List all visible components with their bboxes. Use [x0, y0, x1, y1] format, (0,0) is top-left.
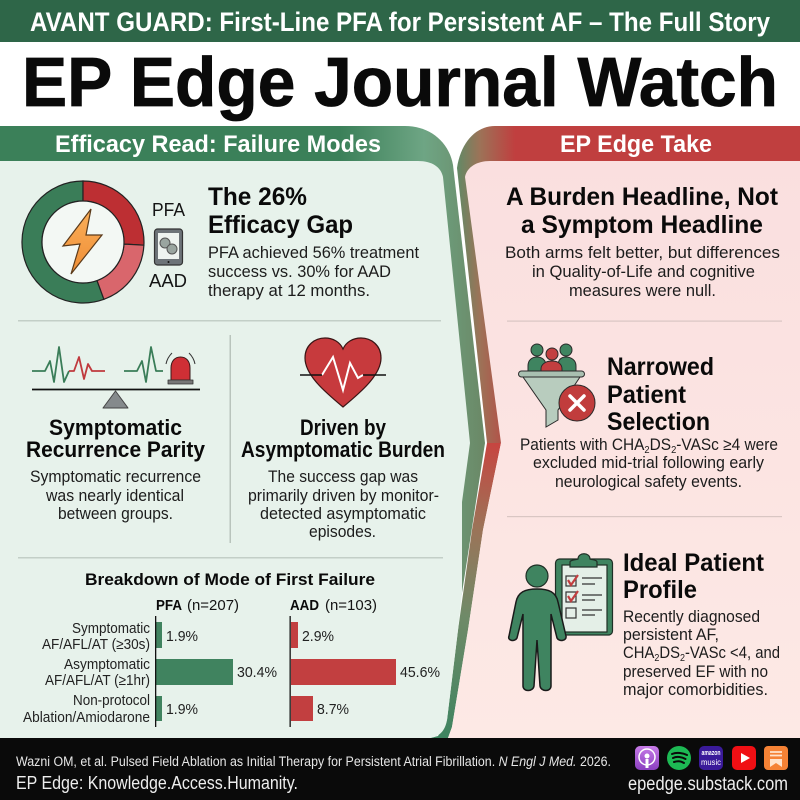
PFA values: 30.4%	[237, 664, 277, 681]
AAD values	[302, 628, 440, 718]
text block: ideal patient profile: DS	[659, 644, 680, 662]
panel: left Efficacy Read body	[0, 161, 470, 738]
text block: burden headline: in Quality-of-Life and cognitive	[532, 263, 755, 281]
row labels: Non-protocol	[73, 693, 150, 709]
text block: narrowed patient selection title: Selection	[607, 408, 710, 436]
text block: burden headline: a Symptom Headline	[521, 211, 763, 239]
icon: funnel with patients and X	[518, 344, 595, 427]
PFA label: PFA	[152, 200, 185, 220]
text block: ideal patient profile: Ideal Patient	[623, 549, 765, 577]
row labels: Symptomatic	[72, 621, 150, 637]
column heading: AAD: (n=103)	[325, 597, 377, 614]
text block: ideal patient profile: preserved EF with no	[623, 663, 768, 681]
text block: narrowed patient selection title: Patient	[607, 381, 687, 409]
footer	[0, 738, 800, 800]
row labels: Asymptomatic	[64, 657, 150, 673]
text block: symptomatic recurrence parity: Recurrence Parity	[26, 437, 206, 462]
PFA values: 1.9%	[166, 701, 198, 718]
icon: amazon music: amazon	[702, 750, 720, 757]
text block: driven by asymptomatic burden	[241, 415, 445, 541]
left panel heading: Efficacy Read: Failure Modes	[55, 131, 381, 158]
text block: symptomatic recurrence parity: Symptomatic	[49, 415, 182, 440]
text block: symptomatic recurrence parity: between groups.	[58, 505, 173, 523]
row labels	[23, 621, 150, 726]
text block: narrowed patient selection title: Narrowed	[607, 353, 714, 381]
text block: ideal patient profile	[623, 549, 780, 699]
text block: ideal patient profile: Profile	[623, 576, 697, 604]
text block: ideal patient profile: 2	[654, 653, 660, 664]
AAD label: AAD	[149, 271, 187, 291]
row labels: AF/AFL/AT (≥30s)	[42, 637, 150, 653]
text block: narrowed patient selection body: DS	[650, 436, 671, 454]
icon: youtube	[732, 746, 756, 770]
PFA values: 1.9%	[166, 628, 198, 645]
text block: burden headline: A Burden Headline, Not	[506, 183, 779, 211]
bar chart: mode of first failure	[23, 570, 440, 727]
main title: EP Edge Journal Watch	[22, 43, 778, 121]
text block: narrowed patient selection body: Patients with CHA	[520, 436, 653, 454]
icon: substack	[764, 746, 788, 770]
text block: ideal patient profile: -VASc <4, and	[685, 644, 780, 662]
text block: burden headline	[505, 183, 780, 300]
text block: ideal patient profile: Recently diagnosed	[623, 608, 760, 626]
icon: tablet with pills	[154, 229, 182, 265]
citation: Wazni OM, et al. Pulsed Field Ablation as Initial Therapy for Persistent Atrial Fibrillation. N Engl J Med. 2026.	[16, 754, 611, 769]
text block: narrowed patient selection title	[607, 353, 714, 436]
column heading: AAD	[290, 597, 377, 614]
text block: narrowed patient selection body	[520, 436, 778, 491]
text block: narrowed patient selection body: -VASc ≥4 were	[676, 436, 778, 454]
text block: ideal patient profile: CHA	[623, 644, 658, 662]
chevron border sweeping to the bottom of the left panel	[430, 443, 501, 738]
AAD bars	[291, 622, 396, 721]
icon: lightning bolt	[63, 209, 102, 274]
column heading: PFA: PFA	[156, 597, 182, 614]
icon: amazon music: music	[701, 757, 722, 767]
tagline: EP Edge: Knowledge.Access.Humanity.	[16, 773, 298, 793]
text block: driven by asymptomatic burden: episodes.	[309, 523, 376, 541]
text block: burden headline: measures were null.	[569, 282, 716, 300]
icon: amazon music	[699, 746, 723, 770]
text block: efficacy gap: Efficacy Gap	[208, 211, 353, 239]
AAD values: 2.9%	[302, 628, 334, 645]
column heading: PFA: (n=207)	[187, 597, 239, 614]
chart title: Breakdown of Mode of First Failure	[85, 570, 375, 589]
text block: efficacy gap: success vs. 30% for AAD	[208, 263, 391, 281]
column heading: PFA	[156, 597, 239, 614]
PFA bars	[156, 622, 233, 721]
text block: symptomatic recurrence parity: Symptomatic recurrence	[30, 468, 201, 486]
text block: efficacy gap	[208, 183, 419, 300]
text block: symptomatic recurrence parity: was nearly identical	[45, 487, 184, 505]
right panel heading: EP Edge Take	[560, 131, 712, 158]
text block: burden headline: Both arms felt better, but differences	[505, 244, 780, 262]
text block: ideal patient profile: 2	[680, 653, 685, 664]
panel: right EP Edge Take header band	[457, 126, 800, 443]
top banner	[0, 0, 800, 42]
text block: driven by asymptomatic burden: The success gap was	[268, 468, 418, 486]
text block: driven by asymptomatic burden: detected asymptomatic	[260, 505, 426, 523]
icon: heart with ECG	[300, 338, 386, 407]
text block: ideal patient profile: persistent AF,	[623, 626, 719, 644]
text block: narrowed patient selection body: excluded mid-trial following early	[533, 454, 765, 472]
panel: left Efficacy Read background band	[0, 126, 485, 738]
text block: driven by asymptomatic burden: Asymptomatic Burden	[241, 437, 445, 462]
text block: narrowed patient selection body: 2	[644, 445, 650, 456]
icon: patient with clipboard	[509, 554, 612, 690]
text block: narrowed patient selection body: 2	[671, 445, 677, 456]
AAD values: 45.6%	[400, 664, 440, 681]
text block: driven by asymptomatic burden: primarily driven by monitor-	[248, 487, 439, 505]
row labels: Ablation/Amiodarone	[23, 710, 150, 726]
PFA values	[166, 628, 277, 718]
text block: efficacy gap: The 26%	[208, 183, 307, 211]
donut chart	[22, 181, 144, 303]
AAD values: 8.7%	[317, 701, 349, 718]
text block: efficacy gap: PFA achieved 56% treatment	[208, 244, 419, 262]
column heading: AAD: AAD	[290, 597, 319, 614]
text block: ideal patient profile: major comorbidities.	[623, 681, 768, 699]
icon: podcasts	[635, 746, 659, 770]
text block: symptomatic recurrence parity	[26, 415, 206, 523]
row labels: AF/AFL/AT (≥1hr)	[45, 673, 150, 689]
icon: balance scale with ECG and alarm	[32, 347, 200, 408]
panel: right EP Edge Take body	[448, 161, 800, 738]
icon: spotify	[667, 746, 691, 770]
text block: driven by asymptomatic burden: Driven by	[300, 415, 387, 440]
text block: efficacy gap: therapy at 12 months.	[208, 282, 370, 300]
text block: narrowed patient selection body: neurological safety events.	[555, 473, 742, 491]
